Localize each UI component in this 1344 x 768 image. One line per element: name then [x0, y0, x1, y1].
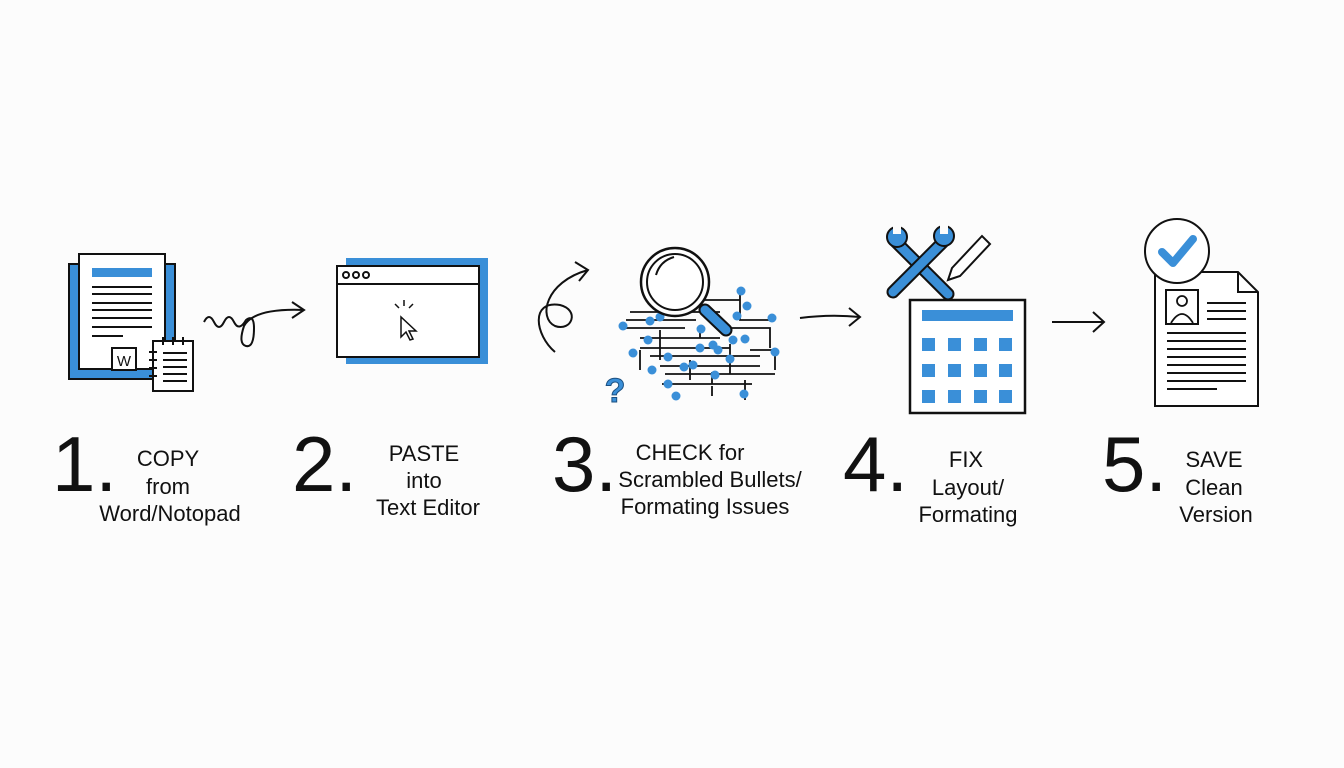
icon: magnifier over scrambled network: ?: [605, 372, 625, 410]
step 4 label: FIX: [949, 447, 983, 472]
step 1 label: from: [146, 474, 190, 499]
step 1 label: Word/Notopad: [99, 501, 241, 526]
arrow: 3 to 4: [800, 308, 860, 326]
step 5 label: Version: [1179, 502, 1253, 527]
step 3 label: Scrambled Bullets/: [618, 467, 803, 492]
step 4 label: Formating: [918, 502, 1018, 527]
icon: layout grid: [910, 300, 1025, 413]
step 2 label: into: [406, 468, 442, 493]
step 3 label: [552, 420, 803, 519]
icon: tools: [887, 224, 990, 294]
icon: magnifier over scrambled network: [605, 248, 780, 410]
arrow: 4 to 5: [1052, 312, 1104, 332]
icon: documents copy: W: [117, 353, 132, 370]
step 4 label: [843, 420, 1018, 527]
step 2 label: [292, 420, 480, 520]
step 1 label: COPY: [137, 446, 199, 471]
arrow: squiggle 1 to 2: [204, 302, 304, 346]
step 2 label: PASTE: [389, 441, 459, 466]
step 2 label: 2.: [292, 420, 357, 508]
step 5 label: Clean: [1185, 475, 1243, 500]
step 1 label: [52, 420, 241, 526]
arrow: loop 2 to 3: [539, 262, 588, 352]
icon: saved document with check: [1145, 219, 1258, 406]
step 4 label: 4.: [843, 420, 908, 508]
step 5 label: SAVE: [1185, 447, 1243, 472]
step 5 label: [1102, 420, 1253, 527]
step 5 label: 5.: [1102, 420, 1167, 508]
step 4 label: Layout/: [932, 475, 1005, 500]
step 3 label: Formating Issues: [621, 494, 789, 519]
step 3 label: CHECK for: [636, 440, 744, 465]
step 3 label: 3.: [552, 420, 617, 508]
icon: documents copy: [69, 254, 193, 391]
step 2 label: Text Editor: [376, 495, 480, 520]
step 1 label: 1.: [52, 420, 117, 508]
icon: browser window: [337, 258, 488, 364]
